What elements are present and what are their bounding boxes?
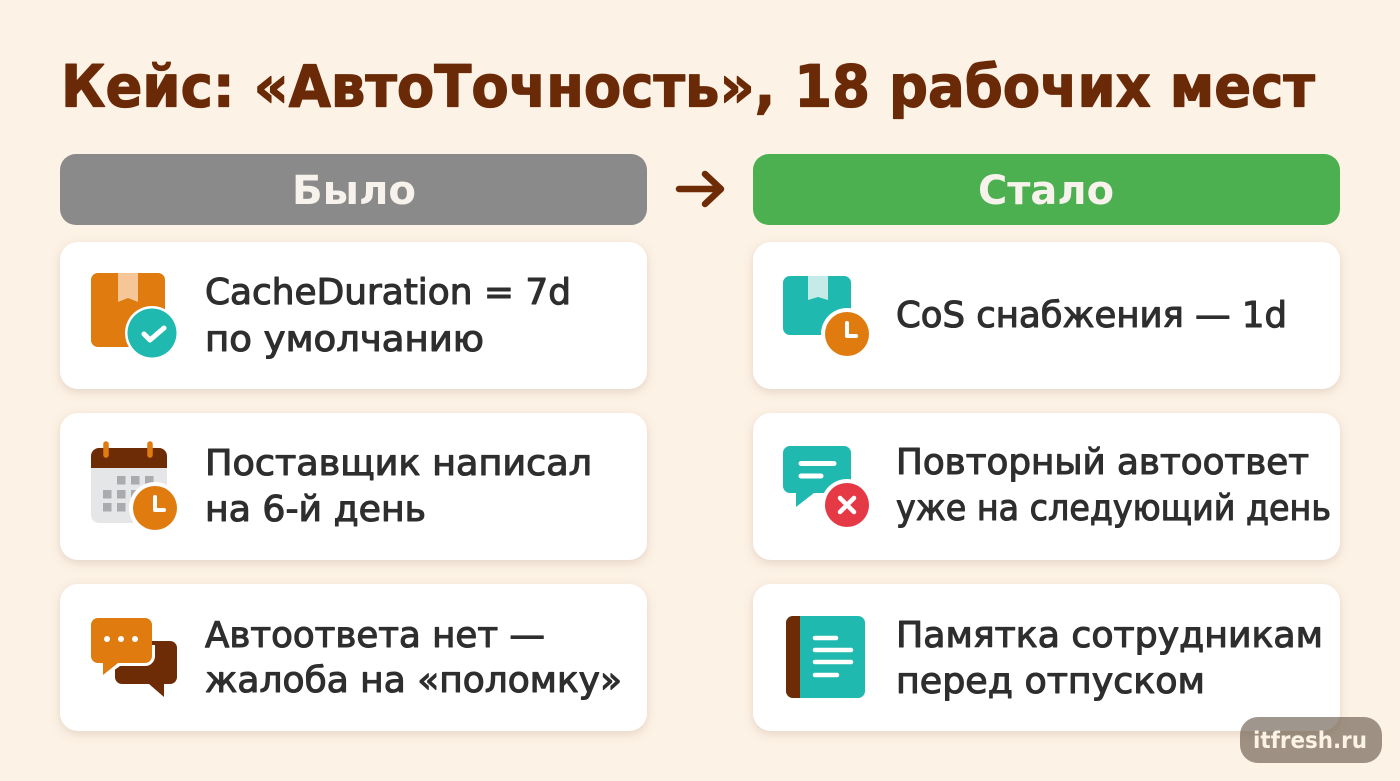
icon: box with check (91, 273, 179, 360)
text block: на 6-й день (205, 489, 426, 530)
icon: calendar with clock (91, 444, 181, 534)
title: Кейс: «АвтоТочность», 18 рабочих мест (61, 52, 1315, 120)
watermark badge (1240, 717, 1382, 763)
text block: CoS снабжения — 1d (896, 295, 1287, 336)
text block: CacheDuration = 7d (205, 272, 571, 313)
header: Стало: Стало (978, 168, 1114, 214)
text block (896, 615, 1323, 702)
icon: notebook (786, 616, 865, 698)
text block: Повторный автоответ (896, 442, 1309, 483)
panel: было, карточка 3 (60, 584, 647, 731)
watermark badge: itfresh.ru (1253, 728, 1367, 754)
header: Было: Было (292, 168, 416, 214)
text block: жалоба на «поломку» (205, 660, 622, 701)
icon: box with clock (783, 276, 873, 360)
icon: chat bubbles (91, 618, 177, 697)
text block: перед отпуском (896, 661, 1205, 702)
text block: Памятка сотрудникам (896, 615, 1323, 656)
panel: стало, карточка 3 (753, 584, 1340, 731)
panel: стало, карточка 2 (753, 413, 1340, 560)
text block: по умолчанию (205, 319, 484, 360)
text block (205, 443, 592, 530)
text block (896, 442, 1331, 529)
header: Было (60, 154, 647, 225)
text block: Поставщик написал (205, 443, 592, 484)
text block (205, 272, 571, 360)
panel: стало, карточка 1 (753, 242, 1340, 389)
panel: было, карточка 2 (60, 413, 647, 560)
text block: Автоответа нет — (205, 615, 545, 656)
panel: было, карточка 1 (60, 242, 647, 389)
icon: message with cross (783, 446, 873, 531)
text block (205, 615, 622, 701)
text block: уже на следующий день (896, 488, 1331, 529)
header: Стало (753, 154, 1340, 225)
arrow (679, 174, 721, 204)
